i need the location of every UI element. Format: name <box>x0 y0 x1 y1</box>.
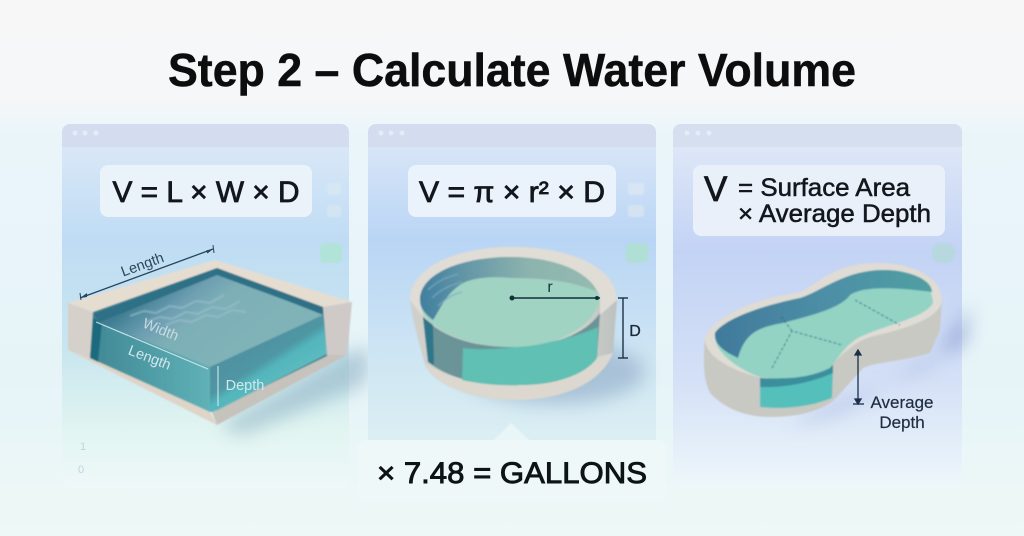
right block <box>323 302 352 360</box>
panel: circular pool <box>368 124 656 488</box>
water front face <box>90 322 210 412</box>
formula: V <box>704 170 728 209</box>
average depth label <box>870 393 934 432</box>
water top surface <box>97 273 323 367</box>
panel header bar <box>673 124 962 147</box>
circular pool <box>410 247 617 400</box>
formula: V = π × r² × D <box>419 176 605 209</box>
panel header bar <box>62 124 349 147</box>
formula box <box>408 165 616 217</box>
top length dimension <box>80 245 214 300</box>
depth label: D <box>629 323 641 340</box>
faint axis numbers: 1 <box>80 441 86 453</box>
outer wall <box>410 247 617 400</box>
water cut face <box>423 313 600 385</box>
radius label: r <box>547 279 553 296</box>
panel header bar <box>368 124 656 147</box>
pool shadow <box>465 340 645 404</box>
window dots <box>378 130 404 136</box>
top length dimension: Length <box>119 250 166 280</box>
callout pointer <box>492 423 531 442</box>
panel: freeform pool <box>673 124 970 488</box>
water right face <box>210 315 327 412</box>
rectangular pool <box>68 260 352 425</box>
depth arrow <box>853 350 864 404</box>
pool shadow <box>790 305 970 425</box>
outer wall <box>704 263 942 417</box>
faint axis numbers <box>78 441 86 476</box>
pool shadow <box>220 350 372 435</box>
water surface <box>715 270 933 378</box>
panel: rectangular pool <box>62 124 372 488</box>
toolbar buttons <box>626 183 648 263</box>
formula box <box>100 165 312 217</box>
window dots <box>72 130 98 136</box>
callout: gallons conversion <box>358 423 666 502</box>
toolbar buttons <box>320 183 342 263</box>
formula <box>704 170 931 228</box>
formula: = Surface Area <box>738 174 910 202</box>
bottom rim <box>68 350 217 425</box>
formula: V = L × W × D <box>112 176 300 209</box>
white dimension lines <box>96 322 218 406</box>
water ripples <box>130 295 246 325</box>
toolbar button <box>932 243 955 263</box>
faint axis numbers: 0 <box>78 464 84 476</box>
bottom rim <box>425 353 613 400</box>
average depth label: Average <box>870 393 934 412</box>
water cut face <box>760 370 833 408</box>
water ripples <box>428 274 462 306</box>
dark back band <box>93 268 323 322</box>
rim top <box>410 247 617 317</box>
callout box <box>358 440 666 502</box>
rim top <box>68 260 352 312</box>
water back wall <box>90 268 327 412</box>
window dots <box>684 130 712 136</box>
left block <box>68 303 93 358</box>
average depth label: Depth <box>879 413 925 432</box>
depth label: Depth <box>226 378 264 394</box>
water surface <box>420 257 600 347</box>
formula: × Average Depth <box>738 200 931 228</box>
rim <box>705 263 942 378</box>
lower right wall <box>212 355 347 425</box>
length label: Length <box>126 343 173 374</box>
depth dimension <box>618 298 628 358</box>
width label: Width <box>140 316 181 345</box>
title: Step 2 – Calculate Water Volume <box>168 44 856 96</box>
deep water band <box>715 270 932 358</box>
zone dashes <box>772 300 900 368</box>
callout text: × 7.48 = GALLONS <box>377 457 647 490</box>
radius line <box>510 279 600 300</box>
peanut pool <box>704 263 942 417</box>
formula box <box>693 165 945 236</box>
